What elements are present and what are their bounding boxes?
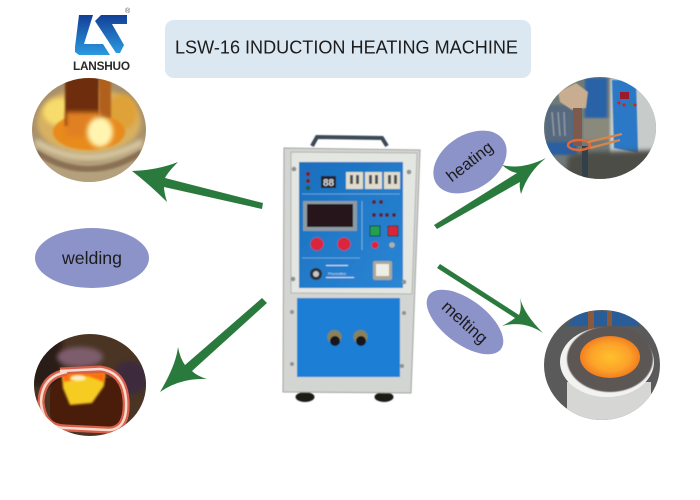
small red lamp [372,242,378,248]
arrow: machine to coil photo [160,298,267,392]
icon: LS mark [75,15,127,55]
toggle switch [389,242,395,248]
label: welding [35,228,149,288]
panel caption: Precrutles [328,271,346,276]
arrow: machine to welding pipe [132,162,263,209]
output connectors [328,330,368,346]
arrow: machine to heating photo [434,158,546,229]
arrow: machine to melting photo [437,264,543,333]
machine handle [312,137,387,146]
photo: coil around glowing metal [32,332,150,438]
control panel frame [291,152,417,294]
photo: heating workpiece [544,77,656,179]
red button [388,226,398,236]
indicator lights [306,172,310,190]
title banner: LSW-16 INDUCTION HEATING MACHINE [175,36,518,58]
photo: melting crucible [544,310,660,420]
photo: welding pipe in glowing coil [32,78,146,182]
label: melting [416,277,514,367]
screws [290,167,411,368]
label: heating [422,118,518,206]
green button [370,226,380,236]
logo: Lanshuo [73,7,131,73]
brand name: LANSHUO [73,59,130,73]
small lamps [372,200,396,217]
machine feet [296,392,394,402]
title banner [165,20,531,78]
output socket [310,268,322,280]
registered mark: ® [125,7,131,15]
red knobs [310,238,350,250]
label: welding: welding [61,248,122,268]
machine: LSW-16 [283,137,420,402]
switch details [350,175,397,184]
label: melting: melting [438,297,491,348]
digital timer: 88 [323,178,334,189]
control panel [299,162,403,288]
lower blue panel [297,298,400,377]
ammeter [373,261,392,280]
power display [303,201,357,231]
dial switches [346,172,400,189]
machine body [283,148,420,393]
label: heating: heating [443,138,497,186]
